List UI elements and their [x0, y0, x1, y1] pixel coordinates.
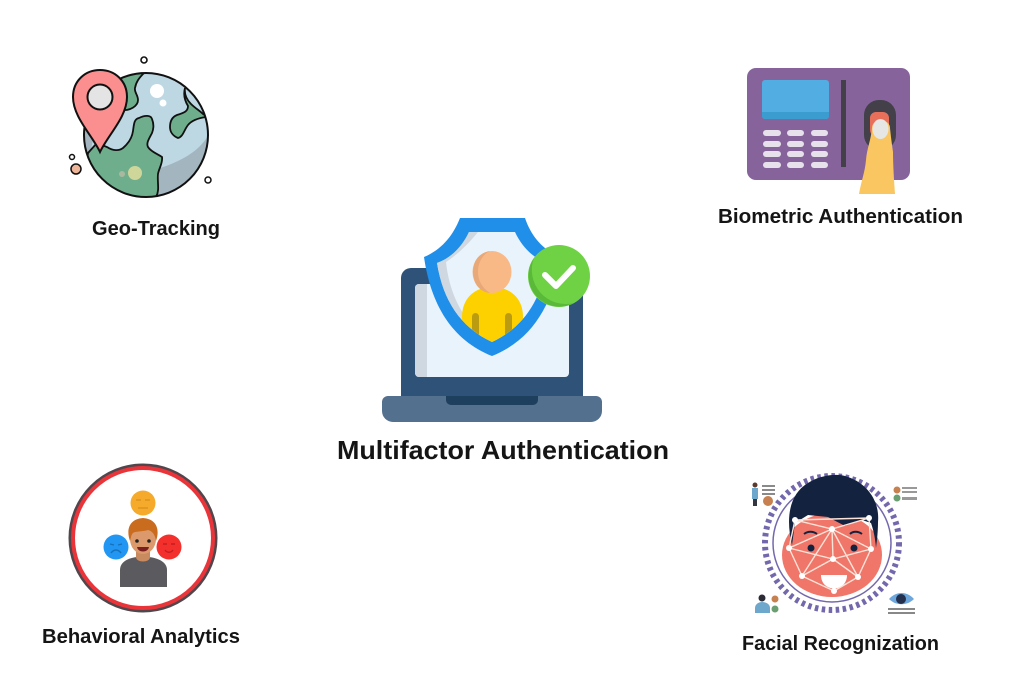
corner icon: bottom left person: [755, 594, 778, 613]
icon: man: [120, 518, 167, 587]
heading: geo-tracking: Geo-Tracking: [92, 218, 220, 240]
icon: laptop with shield and check: [382, 218, 602, 422]
heading: multifactor authentication: Multifactor Authentication: [337, 435, 669, 465]
corner icon: top left figure and data: [752, 482, 775, 506]
icon: behavioral analytics circle: [70, 465, 216, 611]
icon: person: [462, 287, 523, 345]
icon: yellow face: [130, 490, 156, 516]
icon: shield: [424, 218, 560, 356]
icon: finger: [859, 120, 895, 194]
hair: [789, 475, 878, 548]
corner icon: top right charts: [894, 486, 917, 502]
icon: biometric fingerprint terminal: [747, 68, 910, 194]
heading: biometric authentication: Biometric Authentication: [718, 206, 963, 228]
eyes and brows: [808, 544, 814, 552]
icon: red smiling face: [156, 534, 182, 560]
face mesh: [789, 518, 871, 591]
icon: green check badge: [528, 245, 590, 307]
heading: behavioral analytics: Behavioral Analytics: [42, 626, 240, 648]
icon: blue sad face: [104, 534, 128, 560]
icon: map pin: [73, 70, 127, 152]
corner icon: bottom right eye: [888, 593, 915, 614]
heading: facial recognization: Facial Recognization: [742, 633, 939, 655]
face: [782, 513, 882, 597]
mouth: [821, 575, 847, 588]
icon: facial recognition: [752, 475, 917, 614]
icon: geo-tracking globe with pin: [70, 57, 215, 205]
